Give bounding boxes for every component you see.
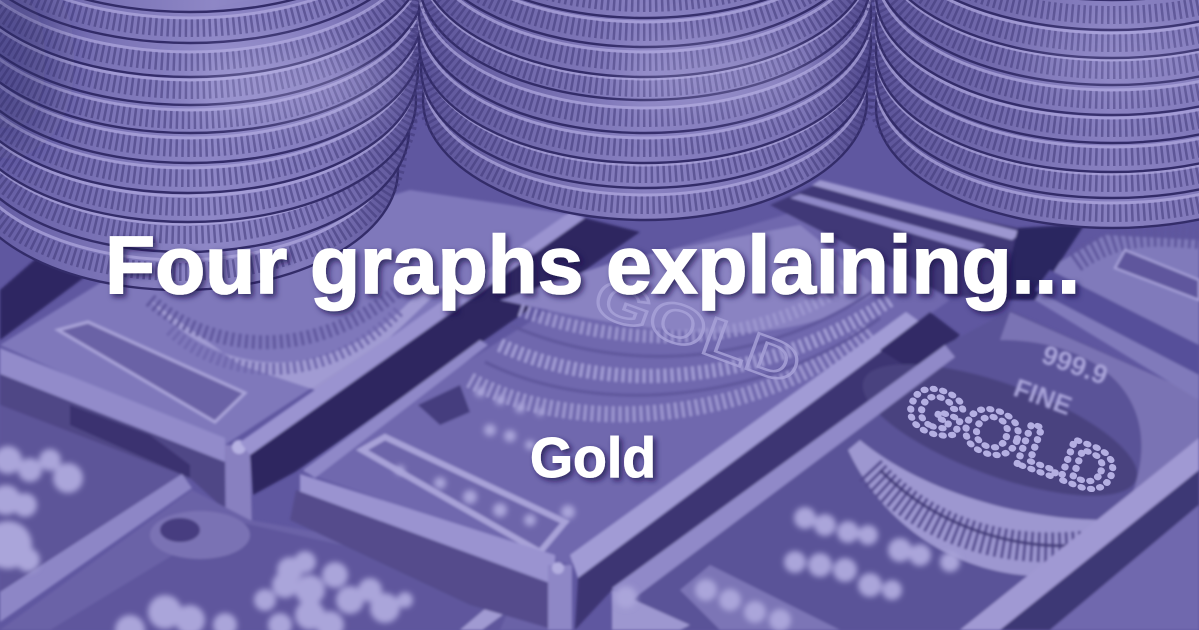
- bar 3 front edge: [612, 590, 690, 630]
- bar 2 left edge: [303, 340, 488, 478]
- coin stack: middle: [419, 0, 871, 220]
- bar 3 left edge: [612, 345, 955, 605]
- bar 2 front edge: [300, 474, 555, 585]
- embossed bar stamp: fineness: FINE: [1010, 372, 1076, 421]
- title: Four graphs explaining...: [105, 220, 1080, 311]
- bar 2 top face: [303, 210, 950, 565]
- dark wedge: [1000, 224, 1085, 300]
- bar 2 stamped panel: [362, 437, 565, 552]
- bar 2 right edge: [570, 312, 920, 578]
- coin stack: left: [0, 0, 425, 290]
- bar 1 front edge: [0, 348, 225, 462]
- embossed bar stamp: GOLD rear: GOLD: [586, 265, 809, 397]
- bar 3 top face: [615, 310, 1199, 630]
- coin stack: right: [876, 0, 1199, 228]
- dark gap bar1/bar2: [250, 218, 640, 495]
- bar 4 corner: [1050, 505, 1199, 630]
- dark gap bar2/bar3: [575, 322, 950, 630]
- subtitle: Gold: [530, 426, 656, 490]
- bar 3 stamped panel: [680, 565, 840, 630]
- bar 1 right edge: [240, 212, 585, 455]
- dark gap top left: [0, 255, 105, 340]
- bar 3 right edge: [960, 438, 1199, 630]
- embossed bar stamp: fineness: 999.9: [1038, 339, 1112, 391]
- embossed bar stamp: fineness: [1010, 339, 1112, 421]
- back bars strip: [770, 185, 1018, 300]
- bar 3 coin reflection: [848, 440, 1105, 576]
- bar 0 edge strip: [0, 474, 192, 622]
- bar 1 stamped panel: [58, 322, 245, 422]
- bar 2 corner: [548, 565, 572, 630]
- bar 1 corner: [225, 445, 252, 530]
- bottom centre bar: [0, 490, 555, 630]
- embossed bar stamp: GOLD front: GOLD: [897, 370, 1126, 510]
- bar 0 lower left face: [0, 405, 190, 610]
- bar 1 reflection: [150, 285, 445, 395]
- coin highlights: [0, 0, 1199, 150]
- embossed lettering blobs: [0, 387, 960, 630]
- dark gap bar3/bar4: [1000, 470, 1199, 630]
- bar 1 top face: [0, 190, 575, 445]
- top-right bar: [1035, 235, 1199, 400]
- bar 2 wavy reflection: [470, 330, 870, 414]
- bar 1 front face: [0, 374, 225, 510]
